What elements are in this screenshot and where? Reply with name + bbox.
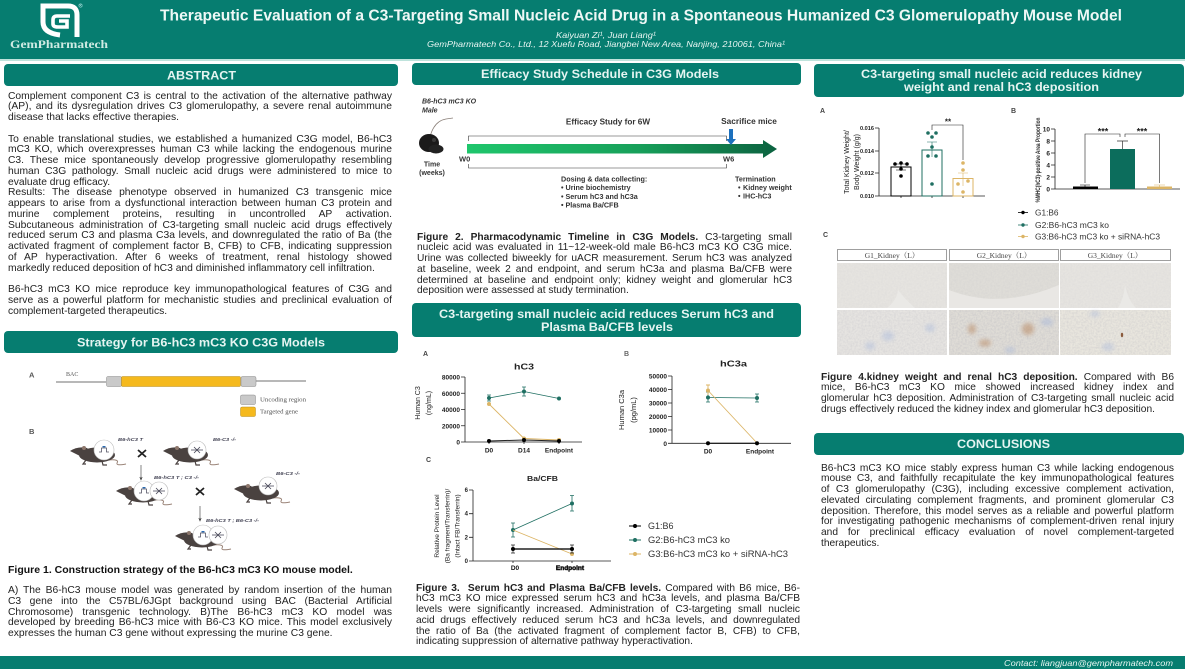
heading: efficacy schedule: Efficacy Study Schedule in C3G Models [481, 69, 719, 81]
series G1 [489, 440, 559, 441]
significance bracket: ** [945, 118, 952, 126]
list: termination [735, 174, 792, 200]
text block: abstract body: appears to arise from a dysfunctional interaction between human C3 protein and [8, 198, 392, 209]
figure 3 caption: indicating suppression of alternative pathway hyperactivation. [416, 636, 693, 647]
week labels: W0 [459, 154, 470, 164]
figure 1B: breeding scheme [29, 427, 301, 550]
chart A: hC3 line chart: D14 [518, 448, 530, 454]
heading: efficacy schedule [412, 63, 801, 85]
heading: conclusions: CONCLUSIONS [957, 439, 1050, 451]
chart A: hC3 line chart [415, 351, 582, 454]
chart B: hC3a line chart: 20000 [649, 414, 667, 421]
figure 2 caption: deposition were assessed at study termination. [417, 285, 629, 296]
chart C: Ba/CFB line chart: Endpoint [556, 565, 585, 572]
chart C: Ba/CFB line chart: C [426, 457, 431, 464]
figure 3 caption: levels were significantly increased. Administration of C3-targeting small nucleic [416, 604, 800, 615]
mouse: B6-C3 -/- parent: B6-C3 -/- [213, 437, 237, 442]
chart A: kidney index bar chart: Body Weight (g/g) [854, 134, 861, 190]
footer band [0, 656, 1185, 669]
chart A: hC3 line chart: D0 [485, 448, 494, 454]
text block: abstract body: disease that lacks effective therapies. [8, 112, 179, 123]
chart A: hC3 line chart: 80000 [442, 374, 460, 382]
title: Therapeutic Evaluation of a C3-Targeting Small Nucleic Acid Drug in a Spontaneous Humanized C3 Glomerulopathy Mouse Model [160, 8, 1122, 24]
series G3 [706, 385, 757, 443]
text block: conclusions body: for investigating pathogenic mechanisms of complement-driven renal injury [821, 516, 1174, 527]
bar G3 [1147, 185, 1172, 189]
chart B: hC3 positive area bar chart: %MHC(hC3)-positive Area Proportion [1035, 117, 1042, 202]
legend: figure 4 groups: G2:B6-hC3 mC3 ko [1035, 220, 1109, 230]
chart C: Ba/CFB line chart: Ba/CFB [527, 474, 559, 483]
arrow: second cross to offspring [199, 506, 201, 521]
figure 2 caption [417, 232, 792, 296]
figure 1 caption: expresses the human C3 gene without expressing the murine C3 gene. [8, 628, 333, 639]
heading: kidney weight and deposition [814, 64, 1184, 97]
chart C: Ba/CFB line chart: 6 [465, 488, 469, 494]
chart B: hC3 positive area bar chart: B [1011, 108, 1016, 115]
chart A: hC3 line chart: 40000 [442, 407, 460, 414]
heading: serum hC3 and plasma levels: Plasma Ba/CFB levels [541, 322, 673, 334]
figure 3 caption: Figure 3. Serum hC3 and Plasma Ba/CFB levels. Compared with B6 mice, B6- [416, 582, 800, 594]
legend: figure 3 groups: G2:B6-hC3 mC3 ko [648, 535, 730, 545]
chart B: hC3 positive area bar chart: 0 [1046, 186, 1050, 193]
series G1 [708, 442, 757, 444]
heading: strategy [4, 331, 398, 353]
list: dosing and data collecting: • Serum hC3 and hC3a [561, 192, 639, 201]
series G2 [706, 392, 759, 402]
heading: kidney weight and deposition: C3-targeting small nucleic acid reduces kidney [861, 69, 1143, 81]
chart B: hC3a line chart: D0 [704, 448, 713, 456]
figure 1 title: Figure 1. Construction strategy of the B6-hC3 mC3 KO mouse model. [8, 564, 353, 576]
figure 2: efficacy timeline [419, 98, 792, 210]
text block: abstract body: B6-hC3 mC3 KO mice reproduce key immunopathological features of C3G and [8, 284, 392, 295]
chart B: hC3 positive area bar chart: 4 [1046, 162, 1050, 169]
figure 1A: BAC construct diagram: BAC [66, 372, 78, 378]
chart C: Ba/CFB line chart: 0 [465, 559, 469, 565]
chart A: hC3 line chart: Human C3 [415, 386, 422, 420]
text block: conclusions body: of C3 glomerulopathy (C3G), including excessive complement activation, [821, 484, 1174, 495]
chart A: kidney index bar chart: 0.012 [860, 171, 874, 177]
mouse: B6-C3 -/- second cross: B6-C3 -/- [276, 471, 301, 476]
figure 2 caption: determined at baseline and endpoint only; kidney weight and glomerular hC3 [417, 274, 792, 286]
legend: figure 3 groups: G1:B6 [648, 521, 674, 531]
text block: conclusions body: therapeutics. [821, 538, 879, 549]
chart A: hC3 line chart: 60000 [442, 391, 460, 398]
chart B: hC3 positive area bar chart: 10 [1043, 126, 1050, 133]
chart C: Ba/CFB line chart: (Intact FB/Transferrin) [454, 494, 462, 558]
text block: conclusions body: B6-hC3 mC3 KO mice stably express human C3 while lacking endogenous [821, 462, 1174, 474]
list: termination: • [738, 183, 741, 192]
chart B: hC3a line chart: 30000 [649, 400, 667, 408]
chart B: hC3a line chart: (pg/mL) [629, 397, 638, 423]
figure 3 caption: the ratio of Ba (the activated fragment of complement factor B, CFB) to CFB, [416, 626, 800, 636]
legend: figure 4 groups [1018, 207, 1160, 241]
significance brackets: *** [1137, 126, 1148, 136]
mouse: B6-hC3 T: B6-hC3 T [118, 437, 145, 442]
significance brackets: *** [1098, 126, 1109, 136]
figure 2 caption: Urine was collected biweekly for uACR measurement. Serum hC3 was analyzed [417, 253, 792, 264]
chart A: kidney index bar chart: 0.010 [860, 194, 874, 200]
mouse: B6-hC3 T ; C3 -/- [116, 475, 200, 505]
bar G1 [1073, 185, 1098, 189]
week labels: W6 [723, 154, 734, 164]
figure 1 caption: A) The B6-hC3 mouse model was generated by random insertion of the human [8, 585, 392, 596]
text block: abstract body: Results: The disease phenotype observed in humanized C3 transgenic mice [8, 187, 392, 198]
chart C: Ba/CFB line chart: (Ba fragment/Transferrin)/ [444, 489, 452, 563]
cross mark 1 [138, 450, 146, 457]
header band [0, 0, 1185, 61]
chart B: hC3a line chart [617, 351, 791, 456]
panel: G2 kidney: G2_Kidney（L） [977, 251, 1031, 260]
list: termination: Kidney weight [743, 183, 792, 192]
figure 2 caption: nucleic acid was evaluated in 11~12-week-old male B6-hC3 mC3 KO C3G mice. [417, 242, 792, 253]
legend: construct regions: Targeted gene [260, 410, 298, 416]
label: study length: Efficacy Study for 6W [566, 118, 650, 126]
mouse photo and model label: (weeks) [419, 170, 445, 177]
text block: conclusions body: elevated circulating complement fragments, and prominent glomerular C3 [821, 495, 1174, 506]
mouse photo and model label: B6-hC3 mC3 KO [422, 98, 477, 106]
list: dosing and data collecting [561, 174, 647, 210]
text block: conclusions body: mouse C3, and faithfully recapitulate the key immunopathological features [821, 473, 1174, 484]
text block: abstract body: C3. These mice spontaneously develop progressive glomerulopathy resembling [8, 155, 392, 166]
series G3 [489, 404, 559, 440]
text block: conclusions body [821, 462, 1174, 549]
chart A: kidney index bar chart: A [820, 108, 825, 115]
chart C: Ba/CFB line chart: 4 [465, 512, 469, 518]
chart B: hC3a line chart: Human C3a [617, 389, 626, 430]
mouse: B6-hC3 T ; C3 -/-: B6-hC3 T ; C3 -/- [154, 475, 200, 480]
chart A: hC3 line chart: Endpoint [545, 448, 574, 454]
panel: G3 kidney: G3_Kidney（L） [1088, 251, 1142, 260]
text block: abstract body: human C3G pathology. Small nucleic acid drugs were administered to mice to [8, 166, 392, 177]
figure 1 caption: developed by breeding B6-hC3 mice with B6-C3 KO mice. This model exclusively [8, 617, 392, 628]
arrow: first cross to offspring [140, 465, 142, 480]
chart B: hC3 positive area bar chart: 6 [1046, 150, 1050, 157]
figure 1A: BAC construct diagram: A [29, 370, 35, 380]
chart B: hC3a line chart: B [624, 351, 629, 358]
figure 1 caption: C3 gene into the C57BL/6JGpt background using BAC (Bacterial Artificial [8, 596, 392, 607]
text block: conclusions body: and for preclinical efficacy evaluation of novel complement-targeted [821, 527, 1174, 538]
icon: GemPharmatech logo: ® [78, 2, 83, 10]
bar G3 [953, 161, 973, 196]
legend: figure 3 groups [629, 521, 788, 559]
bar G2 [922, 131, 942, 196]
authors: Kaiyuan Zi¹, Juan Liang¹ [556, 30, 656, 40]
chart A: hC3 line chart: (ng/mL) [426, 391, 433, 415]
series G2 [511, 496, 574, 537]
chart C: Ba/CFB line chart: 2 [465, 535, 469, 541]
mouse: B6-hC3 T ; B6-C3 -/- offspring [175, 518, 260, 550]
list: dosing and data collecting: Dosing & data collecting: [561, 174, 647, 184]
heading: conclusions [814, 433, 1184, 455]
figure 4 caption: Figure 4.kidney weight and renal hC3 deposition. Compared with B6 [821, 372, 1174, 382]
chart B: hC3 positive area bar chart: 2 [1046, 174, 1050, 181]
figure 1 caption: Chromosome) transgenic technology. B)The B6-hC3 mC3 KO model was [8, 606, 392, 618]
label: sacrifice: Sacrifice mice [721, 116, 777, 126]
chart A: hC3 line chart: A [423, 351, 428, 358]
text block: abstract body: To enable translational studies, we established a humanized C3G model, B6-hC3 [8, 134, 392, 144]
chart B: hC3 positive area bar chart: 8 [1046, 138, 1050, 145]
figure 4C: kidney IHC panels [823, 232, 1171, 355]
text block: abstract body: mC3 KO, which overexpresses human C3 while lacking the endogenous murine [8, 144, 392, 155]
text block: abstract body: (AP), and its dysregulation drives C3 glomerulopathy, a severe renal autoimmune [8, 101, 392, 112]
chart B: hC3a line chart: 50000 [649, 374, 667, 380]
panel: G3 kidney [1060, 250, 1171, 355]
legend: figure 4 groups: G1:B6 [1035, 207, 1059, 217]
heading: kidney weight and deposition: weight and renal hC3 deposition [903, 82, 1099, 94]
figure 4 caption [821, 372, 1174, 415]
heading: serum hC3 and plasma levels [412, 303, 801, 337]
significance bracket [932, 118, 963, 160]
chart A: kidney index bar chart: 0.016 [860, 126, 874, 132]
figure 2 caption: at baseline, week 2 and endpoint, and serum hC3a and plasma Ba/CFB were [417, 264, 792, 275]
figure 3 caption [416, 582, 800, 647]
chart A: kidney index bar chart: Total Kidney Weight/ [844, 130, 851, 194]
chart B: hC3 positive area bar chart [1011, 108, 1180, 202]
mouse: B6-hC3 T [70, 437, 145, 465]
contact: Contact: liangjuan@gempharmatech.com [1004, 658, 1173, 668]
mouse photo and model label [419, 98, 477, 177]
figure 1 caption [8, 585, 392, 639]
list: termination: • [738, 192, 741, 200]
chart B: hC3a line chart: Endpoint [746, 448, 775, 456]
timeline brackets [468, 136, 726, 168]
heading: abstract [4, 64, 398, 86]
legend: construct regions: Uncoding region [260, 398, 306, 404]
mouse: B6-C3 -/- second cross [234, 471, 301, 503]
icon: GemPharmatech logo [43, 2, 83, 37]
text block: conclusions body: deposition. Therefore, this model serves as a reliable and powerful platform [821, 506, 1174, 516]
chart A: kidney index bar chart [820, 108, 985, 200]
panel: G1 kidney [837, 250, 947, 355]
chart B: hC3a line chart: 10000 [649, 428, 667, 434]
text block: abstract body: evaluate drug efficacy. [8, 176, 110, 188]
figure 1A: BAC construct diagram [29, 370, 306, 416]
week labels [459, 154, 734, 164]
legend: figure 4 groups: G3:B6-hC3 mC3 ko + siRNA-hC3 [1035, 231, 1160, 241]
bar G2 [1110, 141, 1135, 189]
figure 4 caption: drugs effectively reduced the kidney index and glomerular hC3 deposition. [821, 404, 1155, 415]
figure 1B: breeding scheme: B [29, 427, 35, 436]
list: dosing and data collecting: • Plasma Ba/CFB [561, 200, 619, 210]
figure 2 caption: Figure 2. Pharmacodynamic Timeline in C3G Models. C3-targeting small [417, 232, 792, 242]
legend: construct regions [240, 395, 306, 416]
chart A: hC3 line chart: hC3 [514, 362, 534, 372]
chart B: hC3a line chart: hC3a [720, 358, 747, 368]
figure 3 caption: hC3 mC3 KO mice expressed serum hC3 and hC3a levels, and plasma Ba/CFB [416, 593, 800, 604]
list: termination: IHC-hC3 [743, 192, 771, 200]
bar G1 [891, 161, 911, 196]
mouse photo and model label: Time [424, 162, 440, 168]
timeline arrow [467, 140, 777, 158]
chart A: kidney index bar chart: 0.014 [860, 149, 875, 155]
series G2 [487, 387, 559, 401]
figure 3 caption: acid drugs effectively reduced serum hC3 and hC3a levels, and downregulated [416, 615, 800, 626]
text block: abstract body: Complement component C3 is central to the activation of the alternative pathway [8, 90, 392, 102]
figure 4 caption: mice, B6-hC3 mC3 KO mice showed increased kidney index and [821, 382, 1174, 393]
text block: abstract body: complement-targeted therapeutics. [8, 306, 167, 316]
legend: figure 3 groups: G3:B6-hC3 mC3 ko + siRNA-hC3 [648, 549, 788, 559]
chart B: hC3a line chart: 40000 [649, 387, 667, 394]
text block: abstract body [8, 90, 392, 316]
chart C: Ba/CFB line chart: Relative Protein Level [434, 494, 441, 558]
heading: abstract: ABSTRACT [167, 70, 236, 82]
figure 4 caption: glomerular hC3 deposition. Administration of C3-targeting small nucleic acid [821, 393, 1174, 404]
chart C: Ba/CFB line chart [426, 457, 611, 572]
series G1 [513, 548, 572, 550]
panel: G1 kidney: G1_Kidney（L） [865, 251, 919, 260]
cross mark 2 [196, 488, 204, 495]
text block: abstract body: murine complement proteins, resulting in uncontrolled AP activation. [8, 209, 392, 220]
affiliation: GemPharmatech Co., Ltd., 12 Xuefu Road, Jiangbei New Area, Nanjing, 210061, China¹ [427, 39, 785, 49]
heading: serum hC3 and plasma levels: C3-targeting small nucleic acid reduces Serum hC3 and [439, 309, 774, 321]
text block: abstract body: reduced serum C3 and plasma C3a levels, and downregulated the ratio of Ba (the [8, 230, 392, 241]
figure 4C: kidney IHC panels: C [823, 232, 828, 239]
list: dosing and data collecting: • Urine biochemistry [561, 183, 631, 192]
list: termination: Termination [735, 174, 776, 184]
text block: abstract body: of AP hyperactivation. After 6 weeks of treatment, renal histology showed [8, 252, 392, 263]
logo wordmark: GemPharmatech [10, 37, 108, 51]
mouse: B6-C3 -/- parent [163, 437, 237, 465]
chart A: hC3 line chart: 20000 [442, 424, 460, 430]
icon: blue sacrifice arrow [726, 129, 736, 145]
significance brackets [1085, 126, 1160, 183]
text block: abstract body: markedly reduced deposition of hC3 and diminished inflammatory cell infiltration. [8, 262, 375, 274]
text block: abstract body: Subcutaneous administration of C3-targeting small nucleic acid drugs effectively [8, 220, 392, 230]
panel: G2 kidney [949, 250, 1059, 355]
mouse photo and model label: Male [422, 108, 438, 114]
series G3 [513, 530, 572, 554]
text block: abstract body: activated fragment of complement factor B, CFB) to CFB, indicating suppression [8, 241, 392, 252]
chart A: hC3 line chart: 0 [456, 440, 460, 446]
text block: abstract body: serve as a powerful platform for mechanistic studies and preclinical evaluation of [8, 295, 392, 306]
chart B: hC3a line chart: 0 [663, 441, 667, 448]
heading: strategy: Strategy for B6-hC3 mC3 KO C3G Models [77, 338, 325, 350]
chart C: Ba/CFB line chart: D0 [511, 565, 520, 572]
mouse: B6-hC3 T ; B6-C3 -/- offspring: B6-hC3 T ; B6-C3 -/- [206, 518, 260, 523]
